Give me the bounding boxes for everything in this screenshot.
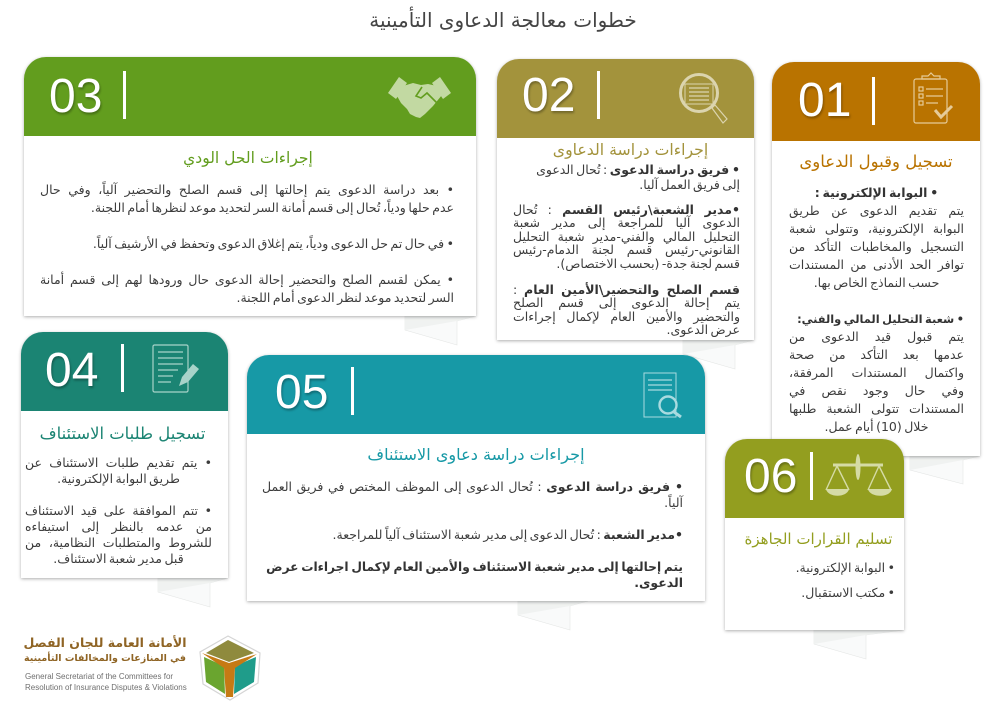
text: step 05: •مدير الشعبة : تُحال الدعوى إلى مدير شعبة الاستئناف آلياً للمراجعة. [333,527,683,542]
ribbon: step 04 [158,578,228,608]
logo: cube mark [200,636,260,701]
text: step 05: • فريق دراسة الدعوى : تُحال الدعوى إلى الموظف المختص في فريق العمل [262,479,683,494]
text: step 02: عرض الدعوى. [667,322,740,337]
text: step 02: إلى فريق العمل آليا. [639,177,740,192]
heading: step 02: إجراءات دراسة الدعاوى [553,140,708,159]
header: step 03 [24,57,476,136]
text: step 01: حسب النماذج الخاص بها. [814,275,939,290]
divider [872,77,875,125]
logo: English name: Resolution of Insurance Disputes & Violations [25,683,187,692]
ribbon: step 03 [404,316,476,346]
text: step 01: واكتمال المستندات المرفقة، [789,365,964,380]
text: step 04 [25,455,212,566]
text: step 06: • البوابة الإلكترونية. [796,560,895,575]
divider [351,367,354,415]
text: step 05 [262,479,684,590]
icon: magnifier [679,73,728,124]
header: step 01 [772,62,980,141]
number 04: 04 [45,344,98,397]
text: step 01: التسجيل والمخاطبات التأكد من [789,239,964,254]
text: step 02: قسم لجنة جدة- (بحسب الاختصاص). [556,256,740,271]
number 03: 03 [49,70,102,123]
text: step 02: والتحضير والأمين العام لإكمال إجراءات [513,309,740,324]
text: step 02: • فريق دراسة الدعوى : تُحال الدعوى [536,162,740,177]
text: step 02: التحليل المالي والفني-مدير شعبة التحليل [513,229,740,244]
text: step 01: عدمها بعد التأكد من صحة [789,347,964,362]
logo: Arabic name [23,635,187,664]
text: step 04: من عدمه بالنظر إلى استيفاءه [25,519,212,534]
text: step 02: القانوني-رئيس قسم لجنة الدمام-رئيس [513,242,740,257]
text: step 04: • تتم الموافقة على قيد الاستئناف [25,503,212,518]
text: step 01: يتم تقديم الدعوى عن طريق [789,203,964,218]
text: step 01: خلال (10) أيام عمل. [824,419,928,434]
text: step 02: قسم الصلح والتحضير\الأمين العام : [513,282,740,297]
panel: step 05 [247,355,705,601]
ribbon: step 01 [910,456,980,484]
number 02: 02 [522,69,575,122]
header: step 02 [497,59,754,138]
text: step 05: آلياً. [664,495,683,510]
text: step 03: • يمكن لقسم الصلح والتحضير إحالة الدعوى حال ورودها لهم إلى قسم أمانة [40,272,454,287]
logo: Arabic name: الأمانة العامة للجان الفصل [23,635,187,650]
text: step 01: البوابة الإلكترونية، وتتولى شعبة [789,221,964,236]
panel: step 01 [772,62,980,456]
icon: handshake [388,77,451,118]
text: step 02: •مدير الشعبة\رئيس القسم : تُحال [513,202,740,217]
icon: document search [644,372,682,418]
divider [121,344,124,392]
ribbon: step 05 [518,601,588,630]
text: step 01 [789,185,964,434]
number 06: 06 [744,450,797,503]
heading: step 05: إجراءات دراسة دعاوى الاستئناف [367,445,585,464]
header: step 05 [247,355,705,434]
icon: clipboard [913,72,953,124]
icon: scales [825,454,892,496]
text: step 02: الدعوى آليا للمراجعة إلى مدير شعبة [513,215,740,230]
text: step 06 [796,560,895,600]
logo: Arabic name: في المنازعات والمخالفات التأمينية [24,653,186,664]
ribbon: step 02 [682,340,754,370]
logo: English name: General Secretariat of the Committees for [25,672,173,681]
text: step 04: قبل مدير شعبة الاستئناف. [53,551,184,566]
text: step 01: توافر الحد الأدنى من المستندات [789,257,964,272]
heading: step 04: تسجيل طلبات الاستئناف [40,424,205,443]
number 01: 01 [798,74,851,127]
text: step 01: • شعبة التحليل المالي والفني: [797,312,964,326]
text: step 06: • مكتب الاستقبال. [801,585,895,600]
heading: step 03: إجراءات الحل الودي [183,149,313,167]
text: step 04: للشروط والمتطلبات النظامية، من [25,535,212,550]
heading: step 06: تسليم القرارات الجاهزة [745,530,892,548]
divider [123,71,126,119]
text: step 03: عدم حلها ودياً، تُحال إلى قسم أمانة السر لتحديد موعد لنظرها أمام اللجنة. [91,200,454,215]
panel: step 06 [725,439,904,630]
text: step 01: • البوابة الإلكترونية : [815,185,938,200]
panel: step 04 [21,332,228,578]
text: step 02 [513,162,740,337]
text: step 03: • بعد دراسة الدعوى يتم إحالتها إلى قسم الصلح والتحضير آلياً، وفي حال [40,182,454,197]
text: step 05: يتم إحالتها إلى مدير شعبة الاستئناف والأمين العام لإكمال اجراءات عرض [266,560,683,574]
number 05: 05 [275,366,328,419]
text: step 03: • في حال تم حل الدعوى ودياً، يتم إغلاق الدعوى وتحفظ في الأرشيف آلياً. [93,236,454,251]
text: step 01: يتم قبول قيد الدعوى من [789,329,964,344]
heading: step 01: تسجيل وقبول الدعاوى [799,152,953,171]
text: step 02: يتم إحالة الدعوى إلى قسم الصلح [513,295,740,310]
header: step 06 [725,439,904,518]
text: step 03 [40,181,454,305]
divider [810,452,813,500]
panel: step 02 [497,59,754,340]
text: step 01: المستندات تتولى الشعبة طلبها [789,401,964,416]
logo [23,635,260,701]
text: step 03: السر لتحديد موعد لنظر الدعوى أمام اللجنة. [236,290,454,305]
header: step 04 [21,332,228,411]
icon: document and pencil [152,344,199,393]
ribbon: step 06 [814,630,904,660]
text: step 01: وفي حال وجود نقص في [789,383,964,398]
title: خطوات معالجة الدعاوى التأمينية [369,8,637,32]
panel: step 03 [24,57,476,316]
logo: English name [25,672,187,692]
text: step 04: • يتم تقديم طلبات الاستئناف عن [25,455,212,470]
divider [597,71,600,119]
text: step 05: الدعوى. [634,575,683,590]
text: step 04: طريق البوابة الإلكترونية. [57,471,180,486]
